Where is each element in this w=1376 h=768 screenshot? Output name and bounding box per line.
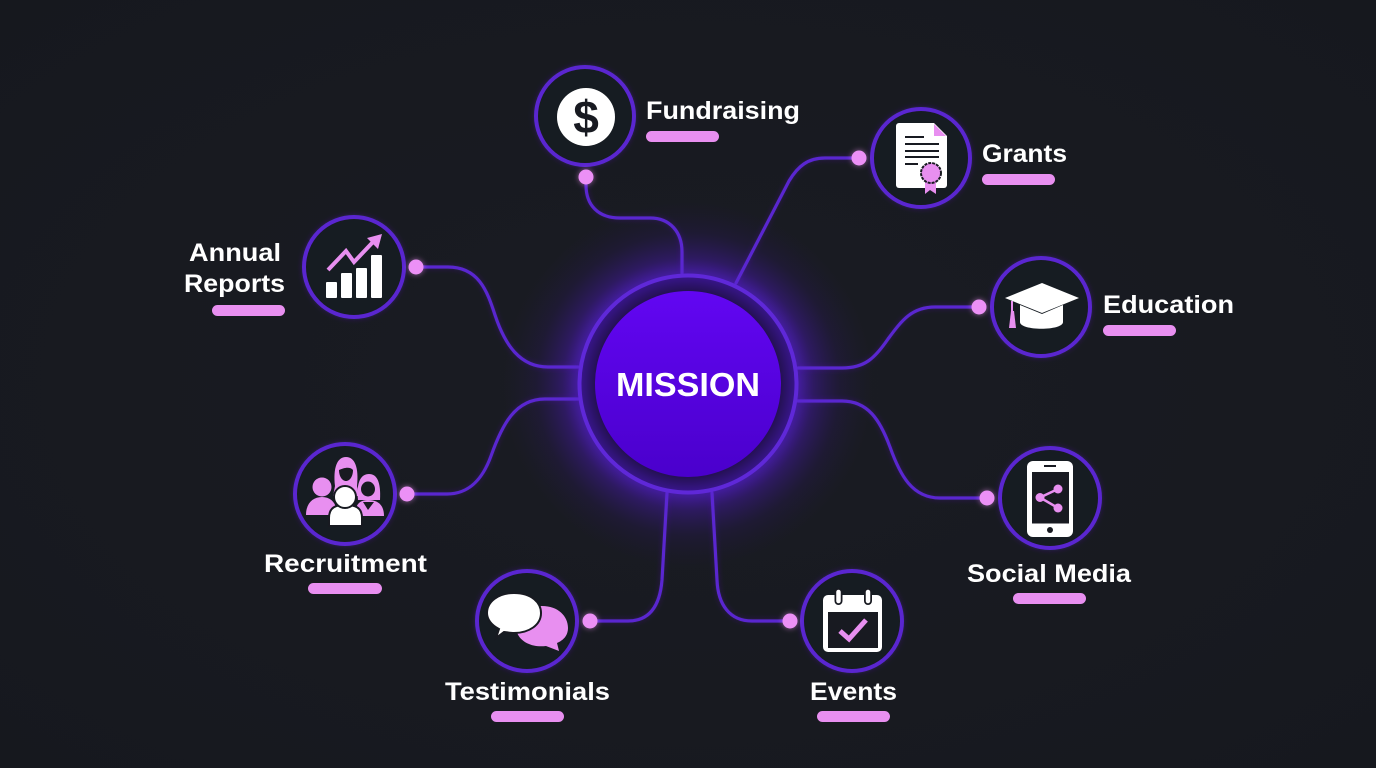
connector: testimonials [590, 493, 667, 621]
hub outer ring [580, 276, 796, 492]
node ring [992, 258, 1090, 356]
connector dot [578, 170, 594, 184]
hub disc [595, 291, 781, 477]
node ring [802, 571, 902, 671]
hub title: MISSION [616, 366, 760, 403]
icon: calendar with check [823, 592, 882, 652]
node ring [872, 109, 970, 207]
node: recruitment [264, 444, 428, 594]
label: Reports [184, 270, 285, 298]
connector dot [782, 614, 798, 628]
node: social media [967, 448, 1132, 604]
node ring [477, 571, 577, 671]
label bar [982, 174, 1055, 185]
node: testimonials [445, 571, 610, 722]
connector: social media [798, 401, 987, 498]
label bar [817, 711, 890, 722]
connector: education [798, 307, 979, 368]
node ring [304, 217, 404, 317]
node: annual reports [184, 217, 424, 317]
label bar [491, 711, 564, 722]
connector dot [972, 300, 986, 314]
icon: certificate document [896, 123, 947, 194]
icon: group of people [306, 457, 384, 526]
connector: annual reports [416, 267, 578, 367]
label: Grants [982, 140, 1067, 168]
node: grants [852, 109, 1067, 207]
connector dot [852, 150, 866, 166]
node ring [536, 67, 634, 165]
label: Fundraising [646, 97, 800, 125]
connector: events [712, 493, 790, 621]
node ring [1000, 448, 1100, 548]
connector: recruitment [407, 399, 578, 494]
connector dot [400, 486, 414, 502]
node: education [972, 258, 1234, 356]
icon: phone with share symbol [1027, 461, 1073, 537]
icon: graduation cap [1005, 283, 1079, 329]
connector dot [408, 260, 424, 274]
connector: grants [736, 158, 859, 283]
label bar [1103, 325, 1176, 336]
label bar [646, 131, 719, 142]
connector: fundraising [586, 177, 682, 273]
center glow [503, 199, 873, 569]
icon: dollar coin: $ [573, 91, 599, 143]
node: fundraising [536, 67, 800, 184]
label: Education [1103, 291, 1234, 319]
node: events [782, 571, 902, 722]
label: Events [810, 678, 897, 706]
icon: growth chart [326, 234, 382, 298]
label bar [308, 583, 382, 594]
label: Recruitment [264, 550, 428, 578]
connector dot [582, 614, 598, 628]
label: Testimonials [445, 678, 610, 706]
central mission hub [580, 276, 796, 492]
connectors [407, 158, 987, 621]
label bar [1013, 593, 1086, 604]
icon: speech bubbles [487, 593, 568, 651]
label [184, 239, 285, 298]
connector dot [980, 490, 994, 506]
node ring [295, 444, 395, 544]
label: Annual [189, 239, 281, 267]
label bar [212, 305, 285, 316]
label: Social Media [967, 560, 1132, 588]
icon: dollar coin [557, 88, 615, 146]
